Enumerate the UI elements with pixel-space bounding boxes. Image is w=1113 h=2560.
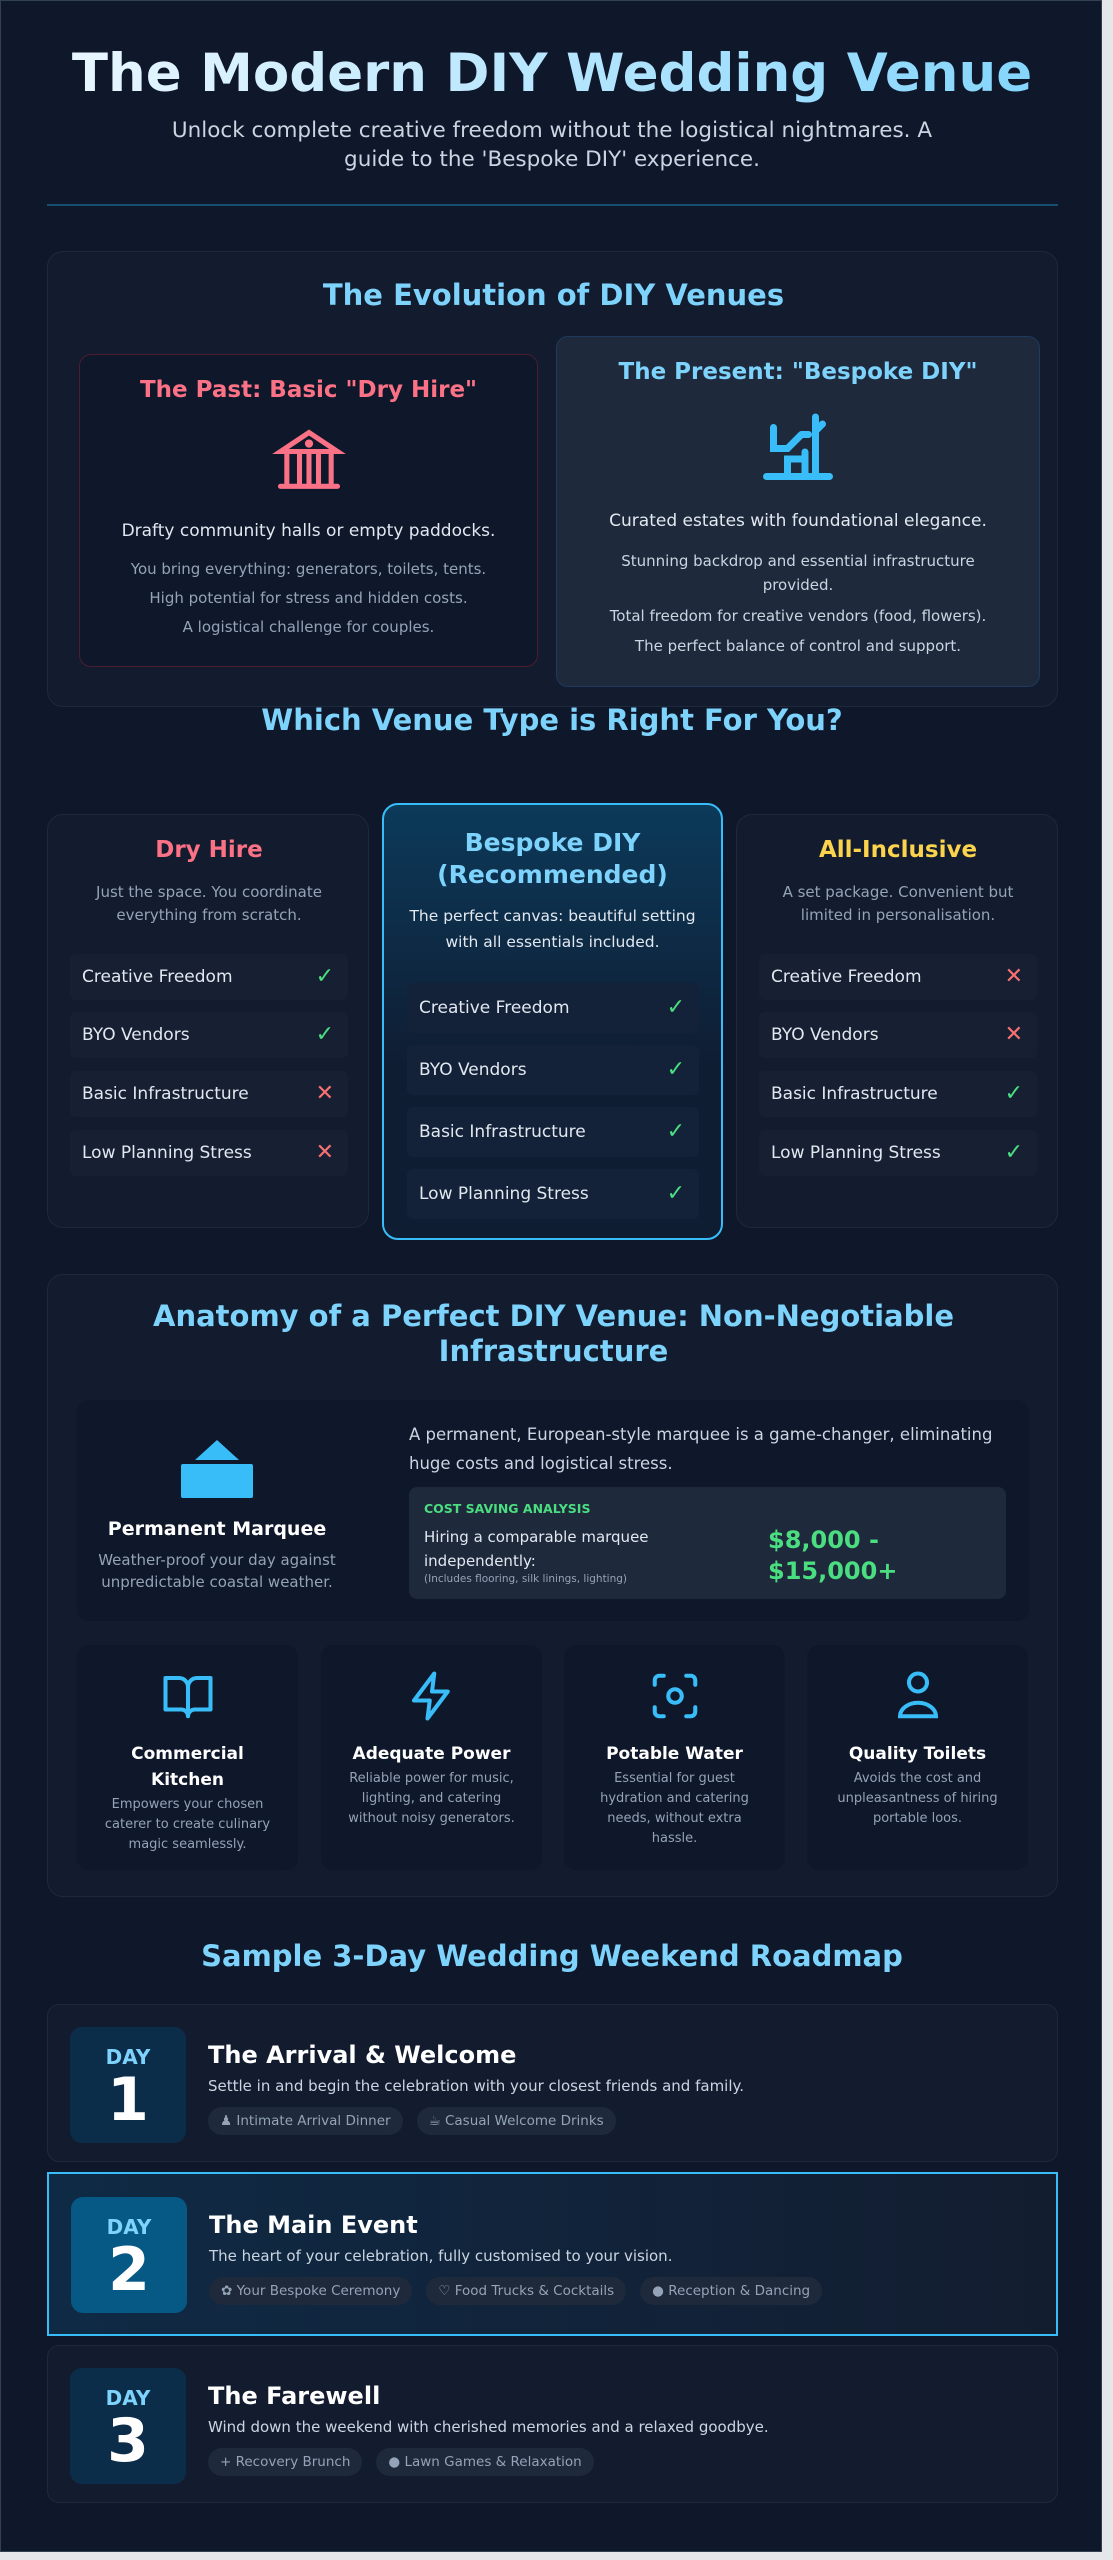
card: toilets: Avoids the cost and unpleasantness of hiring portable loos. (837, 1771, 998, 1826)
callout: cost saving: Hiring a comparable marquee independently: (424, 1528, 649, 1570)
icon: estate (763, 414, 833, 480)
panel: bespoke: Low Planning Stress (419, 1184, 589, 1204)
card: past: A logistical challenge for couples. (183, 618, 434, 636)
marquee block: Weather-proof your day against unpredictable coastal weather. (98, 1551, 336, 1591)
panel: all-inclusive: ✓ (1005, 1081, 1023, 1106)
card: past: The Past: Basic "Dry Hire" (140, 377, 477, 403)
card: water: Potable Water (606, 1744, 743, 1764)
day 3: DAY (106, 2386, 150, 2410)
panel: bespoke: Basic Infrastructure (419, 1122, 586, 1142)
card: power: Adequate Power (353, 1744, 510, 1764)
panel: all-inclusive: ✕ (1005, 964, 1023, 989)
day 3: The Farewell (208, 2382, 380, 2410)
panel: bespoke: Creative Freedom (419, 998, 570, 1018)
callout: cost saving: $8,000 - (768, 1526, 879, 1554)
day 2: 2 (108, 2235, 150, 2305)
panel: bespoke: The perfect canvas: beautiful setting with all essentials included. (409, 907, 696, 951)
panel: anatomy (47, 1274, 1058, 1897)
heading: venue type: Which Venue Type is Right For You? (261, 703, 843, 737)
panel: dry hire: Just the space. You coordinate everything from scratch. (96, 883, 322, 924)
panel: dry hire: ✕ (316, 1081, 334, 1106)
panel: dry hire: ✓ (316, 964, 334, 989)
card: water: Essential for guest hydration and catering needs, without extra hassle. (600, 1771, 749, 1846)
panel: all-inclusive: Creative Freedom (771, 967, 922, 987)
title: The Modern DIY Wedding Venue (72, 43, 1032, 104)
callout: cost saving: $15,000+ (768, 1557, 897, 1585)
panel: all-inclusive: ✕ (1005, 1022, 1023, 1047)
panel: dry hire: Dry Hire (155, 837, 263, 863)
day 3: Wind down the weekend with cherished memories and a relaxed goodbye. (208, 2418, 769, 2436)
card: past: Drafty community halls or empty paddocks. (122, 521, 495, 541)
panel: bespoke: ✓ (667, 1057, 685, 1082)
panel: all-inclusive: Low Planning Stress (771, 1143, 941, 1163)
panel: bespoke: Bespoke DIY (465, 828, 640, 857)
card: toilets (807, 1645, 1028, 1870)
heading: roadmap: Sample 3-Day Wedding Weekend Roadmap (201, 1939, 903, 1973)
panel: bespoke: ✓ (667, 1181, 685, 1206)
marquee block: Permanent Marquee (108, 1518, 326, 1540)
day 2: The Main Event (209, 2211, 418, 2239)
heading: evolution: The Evolution of DIY Venues (323, 278, 784, 312)
day 1: 1 (107, 2065, 149, 2135)
day 2: ● Reception & Dancing (652, 2283, 810, 2299)
card: kitchen: Kitchen (151, 1770, 224, 1790)
day 1: Settle in and begin the celebration with your closest friends and family. (208, 2077, 744, 2095)
panel: all-inclusive: BYO Vendors (771, 1025, 879, 1045)
callout: cost saving: COST SAVING ANALYSIS (424, 1501, 590, 1516)
card: present: The perfect balance of control and support. (635, 637, 961, 655)
card: power (321, 1645, 542, 1870)
panel: bespoke: ✓ (667, 1119, 685, 1144)
marquee block (77, 1400, 1029, 1621)
icon: marquee (181, 1440, 253, 1498)
panel: evolution (47, 251, 1058, 707)
card: toilets: Quality Toilets (849, 1744, 986, 1764)
day 2: ♡ Food Trucks & Cocktails (438, 2283, 614, 2299)
card: present: The Present: "Bespoke DIY" (618, 359, 977, 385)
day 2 (47, 2172, 1058, 2336)
day 2: The heart of your celebration, fully customised to your vision. (209, 2247, 672, 2265)
callout: cost saving: (Includes flooring, silk linings, lighting) (424, 1573, 627, 1585)
day 1: ☕ Casual Welcome Drinks (429, 2113, 604, 2129)
panel: dry hire: Creative Freedom (82, 967, 233, 987)
day 1: DAY (106, 2045, 150, 2069)
card: present: Total freedom for creative vendors (food, flowers). (610, 607, 986, 625)
heading: anatomy (153, 1299, 954, 1368)
day 3 (47, 2345, 1058, 2503)
day 1 (47, 2004, 1058, 2162)
icon: building (272, 430, 346, 489)
card: present (556, 336, 1040, 687)
card: kitchen (77, 1645, 298, 1870)
day 2: DAY (107, 2215, 151, 2239)
card: kitchen: Empowers your chosen caterer to create culinary magic seamlessly. (105, 1797, 270, 1852)
marquee block: A permanent, European-style marquee is a game-changer, eliminating huge costs and logistical stress. (409, 1425, 992, 1473)
panel: dry hire: ✕ (316, 1140, 334, 1165)
card: present: Curated estates with foundational elegance. (609, 511, 987, 531)
card: power: Reliable power for music, lighting, and catering without noisy generators. (348, 1771, 515, 1826)
panel: all-inclusive: ✓ (1005, 1140, 1023, 1165)
panel: bespoke (382, 803, 723, 1240)
card: past: High potential for stress and hidden costs. (149, 589, 468, 607)
panel: bespoke: BYO Vendors (419, 1060, 527, 1080)
panel: all-inclusive: All-Inclusive (819, 837, 977, 863)
day 1: The Arrival & Welcome (208, 2041, 516, 2069)
panel: all-inclusive: A set package. Convenient but limited in personalisation. (783, 883, 1013, 924)
panel: bespoke: ✓ (667, 995, 685, 1020)
callout: cost saving (409, 1487, 1006, 1599)
panel: all-inclusive (736, 814, 1058, 1228)
card: present: Stunning backdrop and essential infrastructure provided. (621, 552, 975, 594)
card: past (79, 354, 538, 667)
panel: dry hire (47, 814, 369, 1228)
card: water (564, 1645, 785, 1870)
subtitle: Unlock complete creative freedom without the logistical nightmares. A guide to the 'Bespoke DIY' experience. (172, 118, 932, 172)
day 2: ✿ Your Bespoke Ceremony (221, 2283, 400, 2299)
day 3: 3 (107, 2406, 149, 2476)
heading: anatomy: Anatomy of a Perfect DIY Venue: Non-Negotiable (153, 1299, 954, 1333)
panel: dry hire: Low Planning Stress (82, 1143, 252, 1163)
panel: all-inclusive: Basic Infrastructure (771, 1084, 938, 1104)
heading: anatomy: Infrastructure (439, 1334, 668, 1368)
panel: dry hire: ✓ (316, 1022, 334, 1047)
panel: dry hire: Basic Infrastructure (82, 1084, 249, 1104)
panel: bespoke: (Recommended) (437, 860, 668, 889)
panel: dry hire: BYO Vendors (82, 1025, 190, 1045)
day 3: + Recovery Brunch (220, 2454, 350, 2470)
card: kitchen: Commercial (131, 1744, 244, 1764)
day 1: ♟ Intimate Arrival Dinner (220, 2113, 391, 2129)
card: past: You bring everything: generators, toilets, tents. (131, 560, 486, 578)
day 3: ● Lawn Games & Relaxation (388, 2454, 582, 2470)
